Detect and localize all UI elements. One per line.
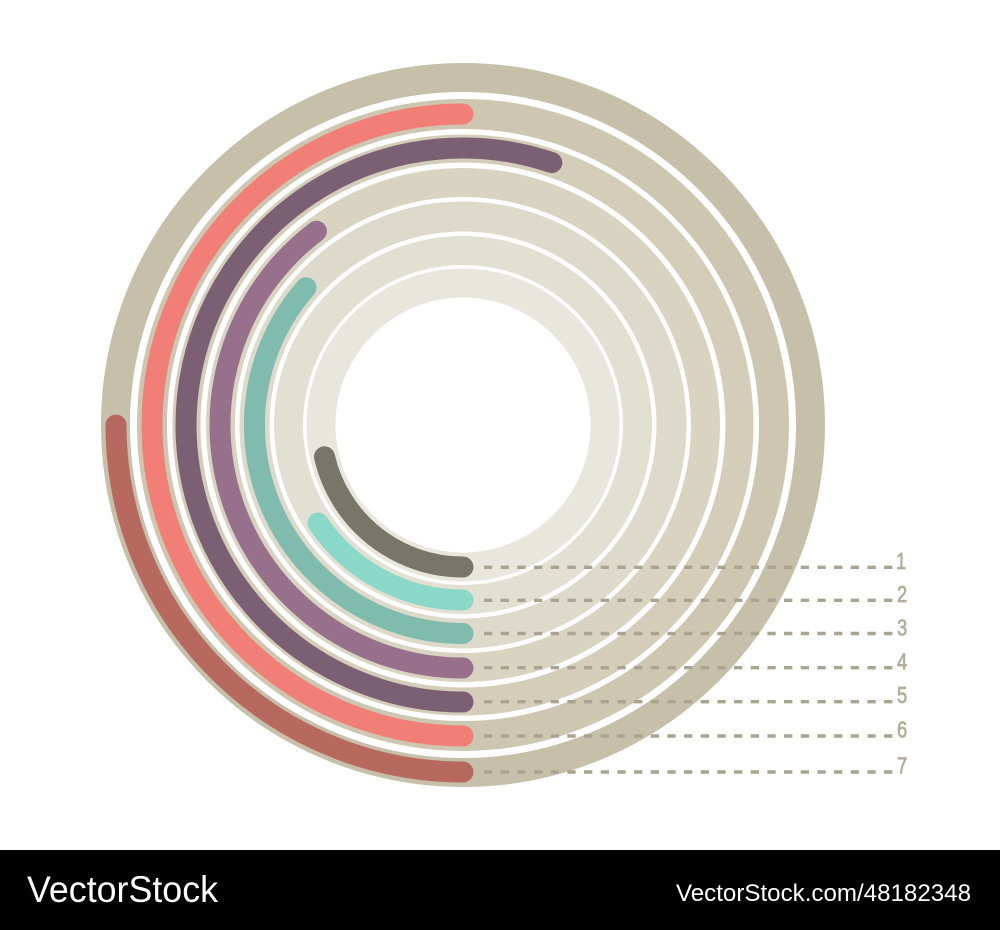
arc 5 [186, 148, 552, 702]
label 3: 3 [897, 616, 907, 641]
footer logo text: VectorStock [27, 869, 218, 910]
dashed leader lines [484, 567, 893, 772]
arc 6 [152, 114, 463, 736]
arc 3 [254, 288, 463, 634]
arc 7 [116, 425, 463, 772]
number labels [896, 549, 907, 779]
footer image id: VectorStock.com/48182348 [676, 880, 971, 907]
chart: concentric background rings [116, 78, 810, 772]
label 1: 1 [896, 549, 906, 575]
arc 2 [318, 523, 463, 600]
label 4: 4 [897, 650, 907, 675]
arc 1 [324, 457, 463, 567]
footer bar [0, 850, 1000, 930]
arc 4 [220, 231, 463, 668]
label 2: 2 [897, 582, 907, 608]
label 7: 7 [897, 754, 907, 779]
label 5: 5 [897, 683, 907, 709]
label 6: 6 [897, 718, 907, 743]
chart: progress arcs [116, 114, 552, 772]
